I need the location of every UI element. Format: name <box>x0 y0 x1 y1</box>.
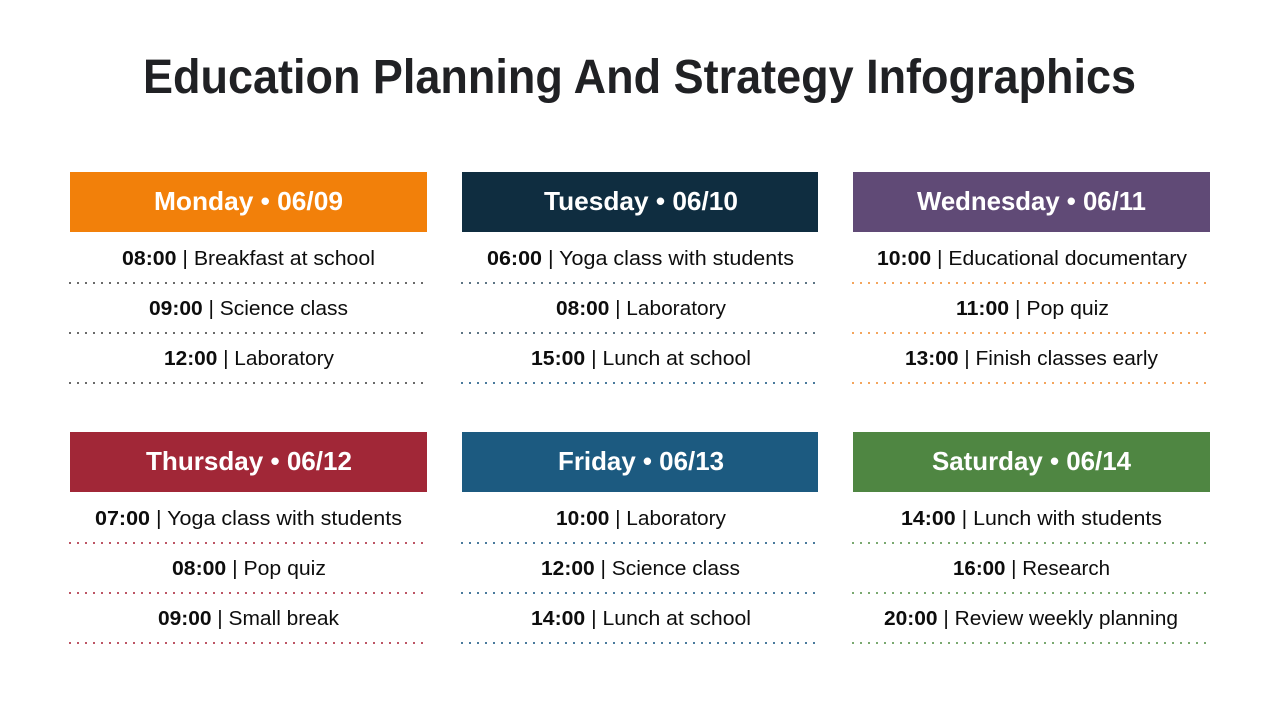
Friday 10:00: 10:00 | Laboratory <box>556 507 727 530</box>
Thursday 07:00: 07:00 | Yoga class with students <box>95 507 402 530</box>
Saturday 20:00: 20:00 | Review weekly planning <box>884 607 1178 630</box>
Saturday 16:00: 16:00 | Research <box>953 557 1110 580</box>
panel: Monday <box>69 172 427 383</box>
Tuesday 06:00: 06:00 | Yoga class with students <box>487 247 794 270</box>
Wednesday 13:00: 13:00 | Finish classes early <box>905 347 1159 370</box>
panel: Thursday <box>69 432 427 643</box>
panel: Friday <box>461 432 818 643</box>
Monday header: Monday • 06/09 <box>154 186 343 216</box>
Thursday 08:00: 08:00 | Pop quiz <box>172 557 326 580</box>
Tuesday header: Tuesday • 06/10 <box>544 186 738 216</box>
Tuesday 15:00: 15:00 | Lunch at school <box>531 347 751 370</box>
Wednesday 11:00: 11:00 | Pop quiz <box>956 297 1109 320</box>
Saturday header: Saturday • 06/14 <box>932 446 1132 476</box>
Thursday 09:00: 09:00 | Small break <box>158 607 340 630</box>
Monday 09:00: 09:00 | Science class <box>149 297 348 320</box>
Monday 12:00: 12:00 | Laboratory <box>164 347 335 370</box>
Monday 08:00: 08:00 | Breakfast at school <box>122 247 375 270</box>
Monday header <box>70 172 427 232</box>
Wednesday header: Wednesday • 06/11 <box>917 186 1146 216</box>
Saturday header <box>853 432 1210 492</box>
Friday 12:00: 12:00 | Science class <box>541 557 740 580</box>
Thursday header: Thursday • 06/12 <box>146 446 352 476</box>
title: Education Planning And Strategy Infographics <box>143 51 1136 104</box>
Friday header <box>462 432 818 492</box>
Tuesday 08:00: 08:00 | Laboratory <box>556 297 727 320</box>
Wednesday header <box>853 172 1210 232</box>
Friday 14:00: 14:00 | Lunch at school <box>531 607 751 630</box>
Tuesday header <box>462 172 818 232</box>
panel: Tuesday <box>461 172 818 383</box>
Friday header: Friday • 06/13 <box>558 446 724 476</box>
panel: Saturday <box>852 432 1210 643</box>
Thursday header <box>70 432 427 492</box>
Saturday 14:00: 14:00 | Lunch with students <box>901 507 1162 530</box>
Wednesday 10:00: 10:00 | Educational documentary <box>877 247 1188 270</box>
panel: Wednesday <box>852 172 1210 383</box>
